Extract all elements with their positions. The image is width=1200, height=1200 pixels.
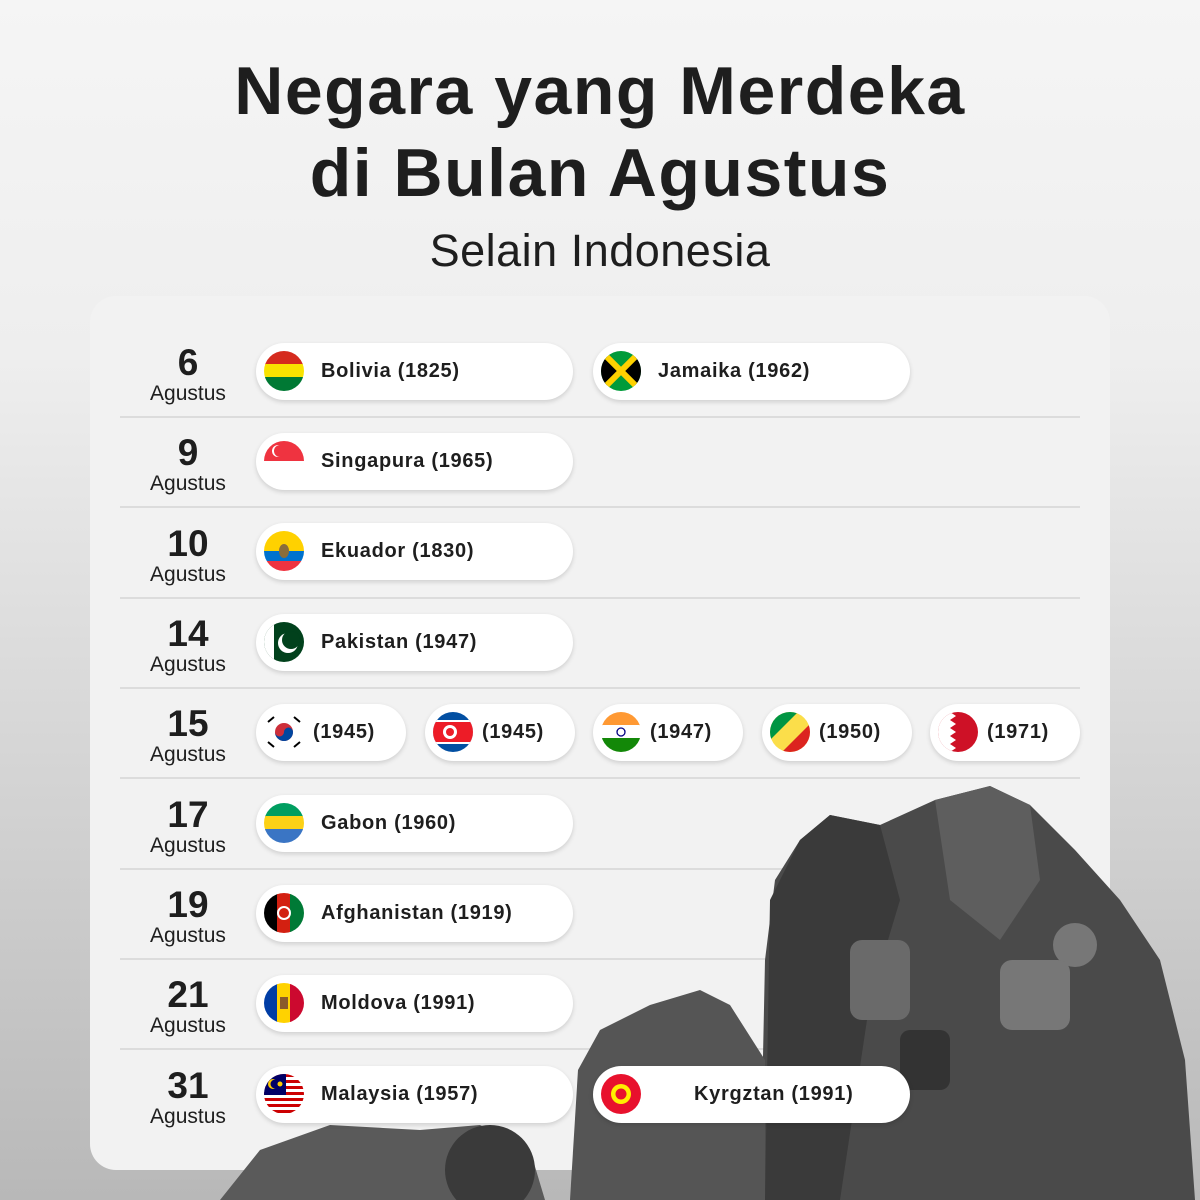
- text: 14: [167, 613, 209, 654]
- pill: Bolivia: [256, 343, 573, 400]
- title: [234, 53, 966, 211]
- pill: Jamaika: [593, 343, 910, 400]
- pill: Singapura: Singapura (1965): [321, 450, 493, 472]
- pill: Afghanistan: [256, 885, 573, 942]
- subtitle: Selain Indonesia: [430, 225, 770, 276]
- pill: Pakistan: [256, 614, 573, 671]
- pills: 15 Agustus: [256, 704, 406, 761]
- pill: Moldova: [256, 975, 573, 1032]
- text: Agustus: [150, 743, 226, 766]
- text: 19: [167, 884, 209, 925]
- pill: Kyrgyzstan: Kyrgztan (1991): [694, 1083, 853, 1105]
- text: Agustus: [150, 834, 226, 857]
- text: Agustus: [150, 924, 226, 947]
- panel: dates list: [90, 296, 1110, 1170]
- pill: Pakistan: Pakistan (1947): [321, 631, 477, 653]
- text: Agustus: [150, 653, 226, 676]
- text: (1971): [987, 721, 1049, 743]
- pill: Gabon: Gabon (1960): [321, 812, 456, 834]
- text: Agustus: [150, 472, 226, 495]
- text: 10: [167, 523, 209, 564]
- pill: Moldova: Moldova (1991): [321, 992, 475, 1014]
- pill: Kyrgyzstan: [593, 1066, 910, 1123]
- pill: Afghanistan: Afghanistan (1919): [321, 902, 513, 924]
- text: Agustus: [150, 563, 226, 586]
- pill: Singapura: [256, 433, 573, 490]
- text: 21: [167, 974, 209, 1015]
- title: Negara yang Merdeka: [234, 53, 966, 129]
- dates: Agustus: [150, 382, 226, 405]
- pill: Ekuador: Ekuador (1830): [321, 540, 474, 562]
- text: (1945): [482, 721, 544, 743]
- pill: Malaysia: Malaysia (1957): [321, 1083, 478, 1105]
- text: (1950): [819, 721, 881, 743]
- pill: Jamaika: Jamaika (1962): [658, 360, 810, 382]
- dates: [150, 342, 226, 405]
- pill: Malaysia: [256, 1066, 573, 1123]
- text: 15: [167, 703, 209, 744]
- text: 31: [167, 1065, 209, 1106]
- pill: Bolivia: Bolivia (1825): [321, 360, 460, 382]
- text: Agustus: [150, 1014, 226, 1037]
- pill: Gabon: [256, 795, 573, 852]
- pill: Ekuador: [256, 523, 573, 580]
- text: 17: [167, 794, 209, 835]
- text: Agustus: [150, 1105, 226, 1128]
- pills: 15 Agustus: (1945): [313, 721, 375, 743]
- title: di Bulan Agustus: [310, 135, 890, 211]
- text: 9: [178, 432, 198, 473]
- dates: 6: [178, 342, 198, 383]
- text: (1947): [650, 721, 712, 743]
